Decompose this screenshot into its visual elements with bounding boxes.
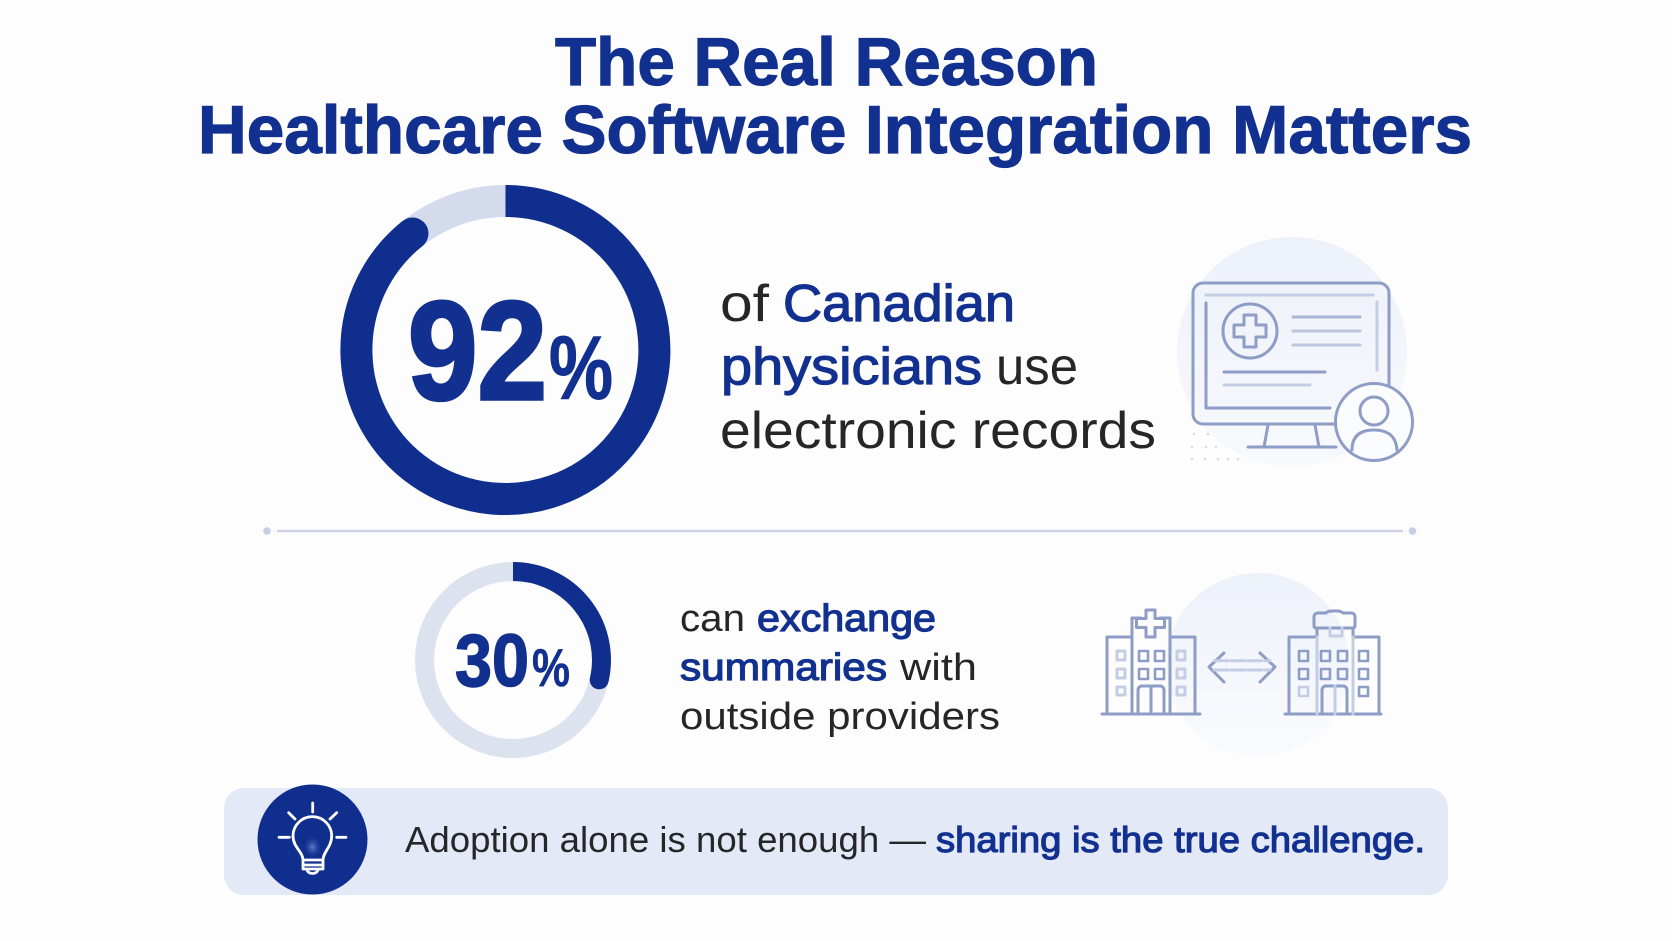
donut chart: 92%: 92 <box>408 272 547 429</box>
text block: 92% description: electronic records <box>720 402 1156 460</box>
icon: monitor with medical record and patient <box>1177 237 1412 467</box>
callout text: Adoption alone is not enough — <box>405 819 926 860</box>
text block: 30% description: exchange <box>757 598 936 640</box>
panel: 30 percent stat <box>424 572 1381 757</box>
title: Healthcare Software Integration Matters <box>198 92 1472 168</box>
text block: 92% description: Canadian <box>783 275 1015 333</box>
text block: 30% description <box>680 598 1000 738</box>
donut chart: 92% <box>356 201 654 499</box>
callout text: sharing is the true challenge. <box>936 819 1425 860</box>
divider <box>263 527 1416 535</box>
icon: right hospital <box>1285 611 1381 714</box>
icon: left hospital <box>1102 610 1200 714</box>
text block: 30% description: can <box>680 598 745 640</box>
title <box>198 24 1472 168</box>
text block: 30% description: outside providers <box>680 696 1000 738</box>
callout text <box>405 819 1425 860</box>
panel: 92 percent stat <box>356 201 1412 499</box>
text block: 92% description: physicians <box>721 338 982 396</box>
icon: two hospitals exchanging data <box>1102 573 1381 757</box>
donut chart: 30%: % <box>532 639 570 698</box>
callout banner <box>224 784 1448 895</box>
text block: 30% description: with <box>899 647 977 689</box>
title: The Real Reason <box>555 24 1098 100</box>
text block: 92% description <box>720 275 1156 460</box>
donut chart: 92%: % <box>549 319 613 419</box>
donut chart: 30% <box>424 572 609 748</box>
text block: 92% description: of <box>720 275 770 333</box>
arrow: two-way exchange <box>1209 653 1275 682</box>
icon: light bulb <box>258 784 368 894</box>
text block: 92% description: use <box>996 338 1078 396</box>
text block: 30% description: summaries <box>680 647 887 689</box>
donut chart: 30%: 30 <box>455 619 529 702</box>
